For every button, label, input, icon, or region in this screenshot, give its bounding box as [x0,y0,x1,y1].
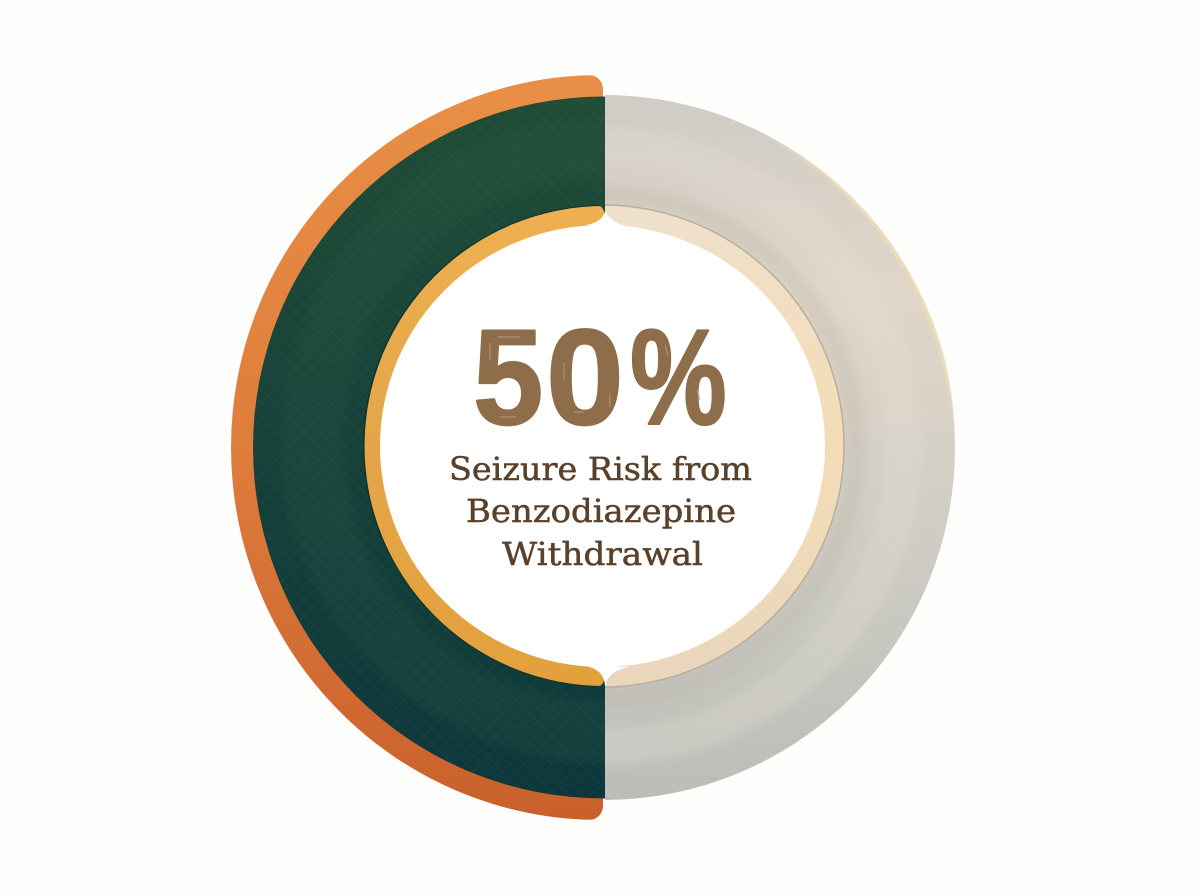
big number: 50% [473,301,727,454]
caption: Withdrawal [502,535,703,573]
orange outer band [231,75,603,820]
big number: 50%: % [630,303,727,454]
cream outer edge highlight [776,140,955,426]
green band crosshatch texture [254,134,605,798]
gray main band [605,95,955,800]
caption [449,450,752,573]
gray pale mid band [605,634,848,760]
caption: Benzodiazepine [466,492,736,530]
big number: 50%: 5 [473,301,543,453]
yellow inner band [363,205,604,687]
notch between segments: bottom [585,666,630,686]
infographic: donut chart [231,75,955,820]
big number: 50%: 0 [546,302,624,454]
caption: Seizure Risk from [449,450,752,488]
dark green main band [253,96,605,798]
center label [449,301,752,573]
panel: filled half (50% segment) [231,75,605,820]
gray inner shading [605,190,862,606]
cream inner band [605,204,845,688]
green lighter mid band [312,148,896,732]
notch between segments: top [586,211,628,227]
center hole [380,225,825,667]
panel: remaining half [605,95,955,800]
